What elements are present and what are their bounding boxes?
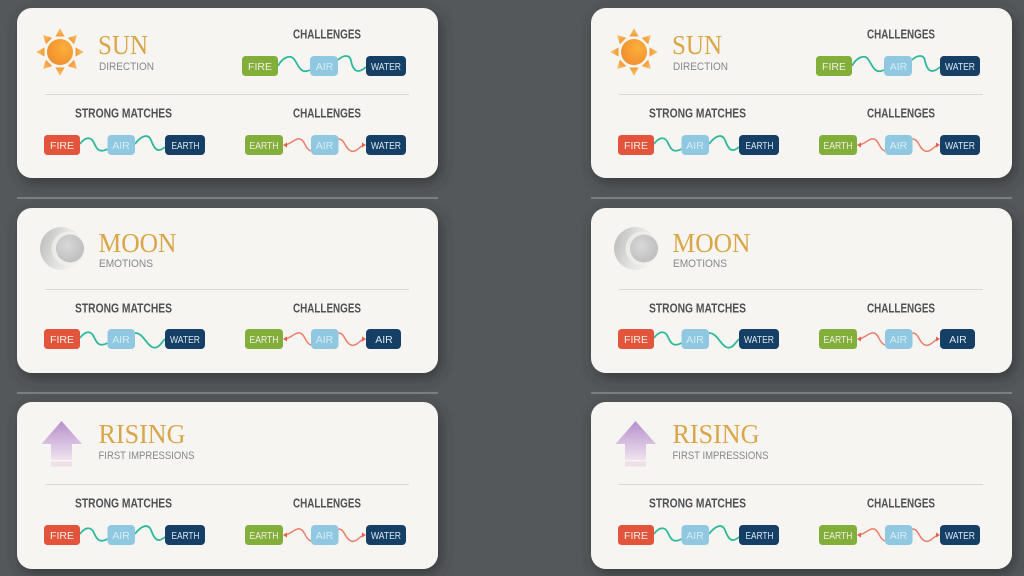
chain: fire air water: FIRE [624, 334, 648, 346]
title: rising: RISING [672, 419, 760, 449]
chain: earth air water [819, 135, 980, 155]
icon: rising arrow [616, 421, 656, 466]
chain: fire air water [242, 56, 406, 76]
heading: strong matches: STRONG MATCHES [75, 300, 172, 316]
chain: fire air earth: EARTH [746, 530, 774, 542]
left column [17, 8, 438, 569]
title: moon: MOON [98, 228, 176, 258]
subtitle: emotions: EMOTIONS [673, 258, 727, 270]
panel: sun [17, 8, 438, 178]
chain: earth air water: WATER [371, 530, 401, 542]
heading: challenges top: CHALLENGES [293, 26, 361, 42]
subtitle: direction: DIRECTION [673, 61, 728, 73]
heading: strong matches: STRONG MATCHES [649, 300, 746, 316]
subtitle: first impressions: FIRST IMPRESSIONS [98, 450, 194, 462]
heading: challenges: CHALLENGES [867, 300, 935, 316]
chain: earth air water: AIR [890, 530, 908, 542]
chain: earth air water: AIR [890, 140, 908, 152]
chain: earth air water [245, 135, 406, 155]
panel: moon [17, 208, 438, 373]
chain: fire air water: AIR [686, 334, 704, 346]
chain: fire air earth: AIR [112, 140, 130, 152]
chain: earth air air [245, 329, 401, 349]
right column [591, 8, 1012, 569]
chain: earth air water: WATER [945, 530, 975, 542]
chain: fire air water: AIR [112, 334, 130, 346]
chain: fire air water: AIR [316, 61, 334, 73]
chain: earth air water: AIR [316, 140, 334, 152]
heading: strong matches: STRONG MATCHES [649, 106, 746, 120]
heading: challenges: CHALLENGES [293, 106, 361, 120]
chain: earth air water: EARTH [824, 530, 852, 542]
title: moon: MOON [672, 228, 750, 258]
chain: earth air water: AIR [316, 530, 334, 542]
heading: challenges: CHALLENGES [293, 496, 361, 510]
icon: rising arrow [42, 421, 82, 466]
chain: earth air air: AIR [316, 334, 334, 346]
chain: fire air water: WATER [744, 334, 774, 346]
title: sun: SUN [672, 30, 722, 60]
chain: earth air water [245, 525, 406, 545]
chain: fire air earth [44, 525, 205, 545]
chain: earth air water [819, 525, 980, 545]
panel: moon [591, 208, 1012, 373]
chain: fire air water: FIRE [50, 334, 74, 346]
chain: fire air water: FIRE [822, 61, 846, 73]
heading: challenges top: CHALLENGES [867, 26, 935, 42]
chain: earth air air: EARTH [250, 334, 278, 346]
panel: rising [591, 402, 1012, 569]
chain: earth air air: EARTH [824, 334, 852, 346]
heading: challenges: CHALLENGES [293, 300, 361, 316]
chain: fire air water: WATER [945, 61, 975, 73]
chain: earth air water: WATER [371, 140, 401, 152]
chain: earth air water: EARTH [824, 140, 852, 152]
chain: fire air earth: FIRE [624, 530, 648, 542]
title: rising: RISING [98, 419, 186, 449]
chain: earth air water: EARTH [250, 530, 278, 542]
chain: earth air air: AIR [375, 334, 393, 346]
icon: moon [614, 227, 660, 270]
subtitle: emotions: EMOTIONS [99, 258, 153, 270]
chain: fire air water [816, 56, 980, 76]
icon: sun [36, 28, 84, 76]
chain: earth air air: AIR [949, 334, 967, 346]
chain: fire air earth: EARTH [172, 140, 200, 152]
chain: fire air water: AIR [890, 61, 908, 73]
heading: strong matches: STRONG MATCHES [75, 106, 172, 120]
chain: fire air earth: EARTH [746, 140, 774, 152]
icon: moon [40, 227, 86, 270]
chain: fire air water [44, 329, 205, 349]
chain: fire air water: WATER [371, 61, 401, 73]
chain: fire air water: WATER [170, 334, 200, 346]
heading: challenges: CHALLENGES [867, 496, 935, 510]
heading: challenges: CHALLENGES [867, 106, 935, 120]
chain: earth air water: WATER [945, 140, 975, 152]
chain: earth air water: EARTH [250, 140, 278, 152]
chain: fire air earth: FIRE [50, 530, 74, 542]
chain: fire air earth: AIR [686, 140, 704, 152]
heading: strong matches: STRONG MATCHES [75, 496, 172, 510]
chain: fire air earth: EARTH [172, 530, 200, 542]
chain: fire air water [618, 329, 779, 349]
chain: earth air air [819, 329, 975, 349]
icon: sun [610, 28, 658, 76]
chain: fire air earth: FIRE [624, 140, 648, 152]
chain: fire air earth: AIR [686, 530, 704, 542]
title: sun: SUN [98, 30, 148, 60]
chain: fire air earth [618, 135, 779, 155]
heading: strong matches: STRONG MATCHES [649, 496, 746, 510]
subtitle: direction: DIRECTION [99, 61, 154, 73]
chain: earth air air: AIR [890, 334, 908, 346]
chain: fire air earth [44, 135, 205, 155]
chain: fire air earth [618, 525, 779, 545]
subtitle: first impressions: FIRST IMPRESSIONS [672, 450, 768, 462]
panel: sun [591, 8, 1012, 178]
panel: rising [17, 402, 438, 569]
chain: fire air earth: AIR [112, 530, 130, 542]
chain: fire air earth: FIRE [50, 140, 74, 152]
chain: fire air water: FIRE [248, 61, 272, 73]
